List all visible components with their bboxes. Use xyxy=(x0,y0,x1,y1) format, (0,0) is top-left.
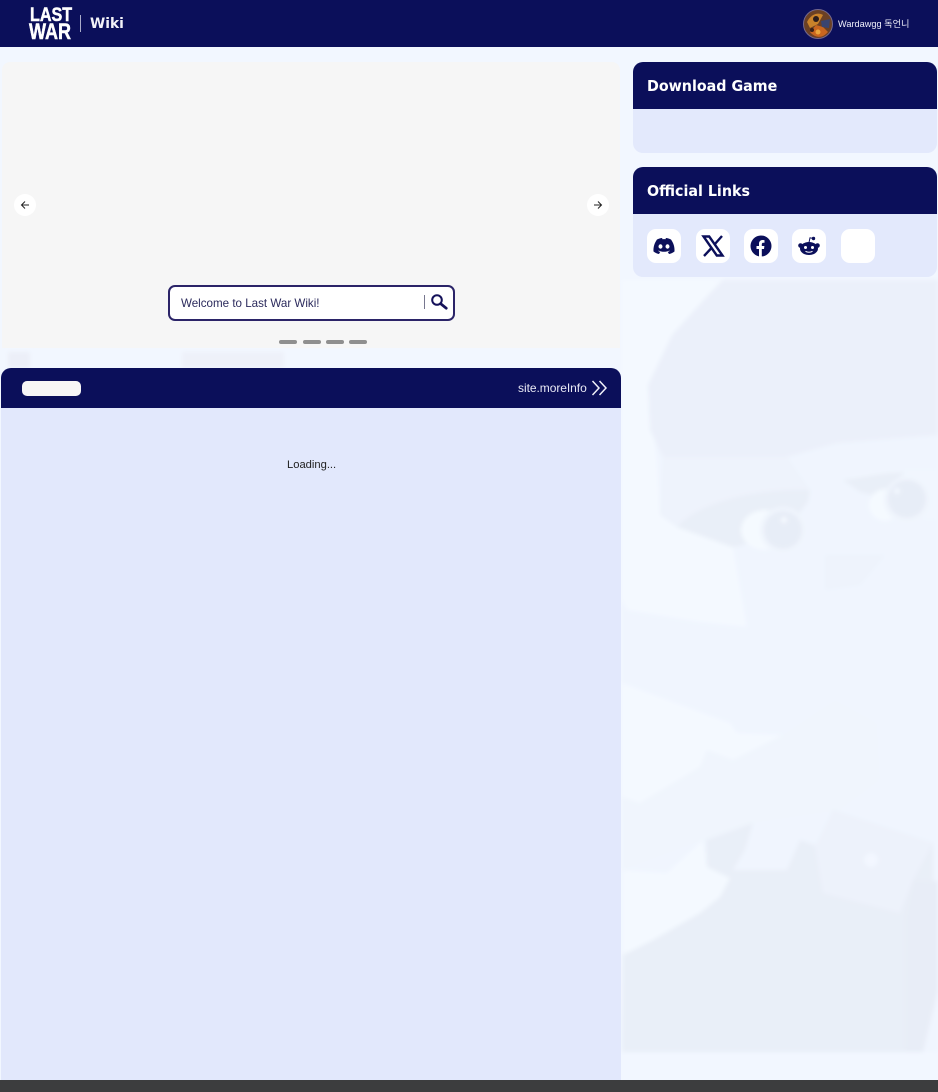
download game heading xyxy=(633,62,937,109)
loading text: Loading... xyxy=(287,459,336,471)
title placeholder xyxy=(22,381,81,396)
hero carousel xyxy=(2,62,620,348)
icon: discord xyxy=(647,229,681,263)
logo: Last War: WAR xyxy=(29,19,71,44)
wiki label: Wiki xyxy=(90,16,124,32)
more info link: site.moreInfo xyxy=(518,381,587,395)
official links heading: Official Links xyxy=(647,182,750,200)
panel: main content xyxy=(1,368,621,1080)
logo: Last War xyxy=(28,5,72,44)
user name: Wardawgg 독언니 xyxy=(838,19,909,29)
footer bar xyxy=(0,1080,938,1092)
search placeholder text: Welcome to Last War Wiki! xyxy=(181,297,320,310)
icon: user avatar xyxy=(803,9,833,39)
search box xyxy=(168,285,455,321)
icon: search xyxy=(431,294,448,310)
arrow: carousel next xyxy=(587,194,609,216)
carousel pagination xyxy=(279,340,367,344)
panel: download game xyxy=(633,62,937,153)
user profile xyxy=(803,9,909,39)
icon: X xyxy=(696,229,730,263)
icon: facebook xyxy=(744,229,778,263)
arrow: carousel previous xyxy=(14,194,36,216)
official links heading xyxy=(633,167,937,214)
icon: blank link tile xyxy=(841,229,875,263)
search divider xyxy=(424,295,425,309)
panel: official links xyxy=(633,167,937,277)
header bar xyxy=(0,0,938,47)
panel header xyxy=(1,368,621,408)
logo: Last War: LAST xyxy=(30,5,72,26)
icon: reddit xyxy=(792,229,826,263)
download game heading: Download Game xyxy=(647,77,777,95)
